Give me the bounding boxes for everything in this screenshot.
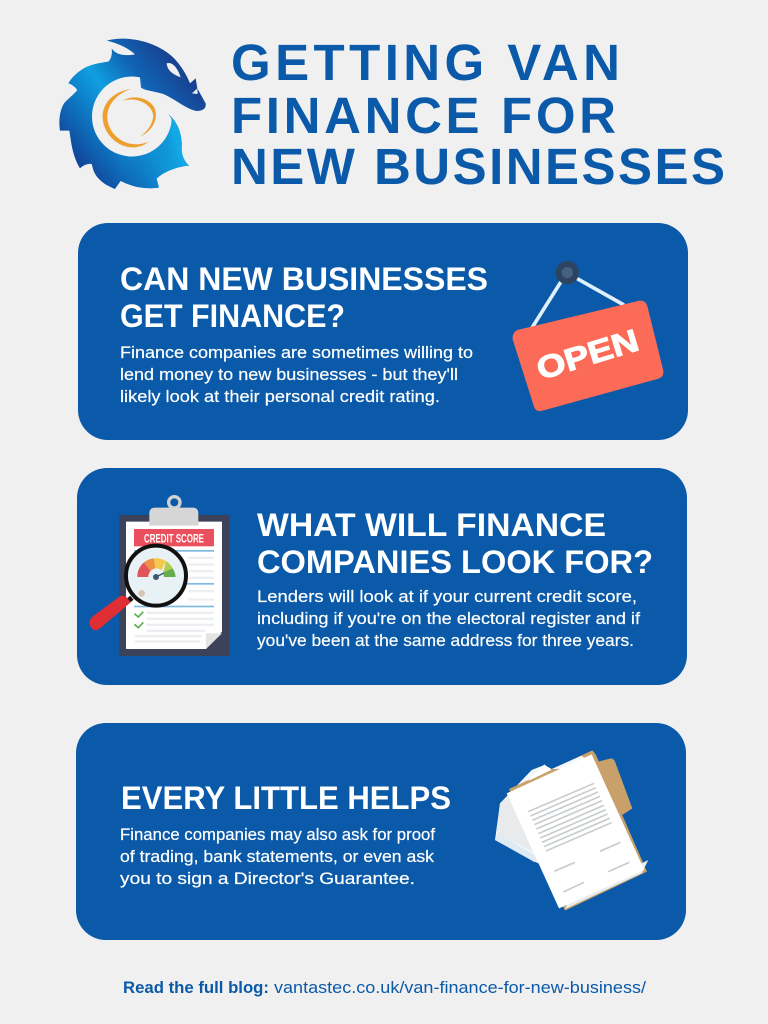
title: GETTING VAN (231, 34, 620, 91)
heading: GET FINANCE? (120, 298, 345, 334)
footer: blog link: vantastec.co.uk/van-finance-for-new-business/ (274, 979, 646, 997)
text block: of trading, bank statements, or even ask (120, 847, 435, 866)
text block: Lenders will look at if your current credit score, (257, 587, 637, 606)
footer: blog link: Read the full blog: (123, 979, 269, 997)
icon: dragon logo (59, 39, 206, 189)
heading: COMPANIES LOOK FOR? (257, 544, 653, 580)
footer: blog link (123, 979, 646, 997)
title: NEW BUSINESSES (231, 138, 725, 195)
heading (120, 261, 488, 334)
icon: open sign: OPEN (532, 323, 643, 387)
heading: EVERY LITTLE HELPS (121, 780, 451, 816)
panel: every little helps (76, 723, 686, 940)
title: FINANCE FOR (231, 87, 616, 144)
heading: WHAT WILL FINANCE (257, 507, 606, 543)
text block: including if you're on the electoral register and if (257, 609, 640, 628)
text block (257, 587, 640, 650)
panel: can new businesses get finance (78, 223, 688, 440)
panel: what will finance companies look for (77, 468, 687, 685)
text block: Finance companies are sometimes willing to (120, 343, 473, 362)
icon: stack of documents (495, 750, 648, 911)
text block: you to sign a Director's Guarantee. (120, 869, 415, 888)
icon: open sign (513, 261, 663, 411)
icon: credit score clipboard: CREDIT SCORE (144, 532, 204, 546)
text block: you've been at the same address for three years. (257, 631, 634, 650)
text block (120, 825, 435, 888)
icon: credit score clipboard (89, 497, 229, 656)
text block: Finance companies may also ask for proof (120, 825, 435, 844)
text block: likely look at their personal credit rating. (120, 387, 440, 406)
heading: CAN NEW BUSINESSES (120, 261, 488, 297)
title (231, 34, 725, 195)
text block (120, 343, 473, 406)
heading (257, 507, 653, 580)
text block: lend money to new businesses - but they'll (120, 365, 458, 384)
